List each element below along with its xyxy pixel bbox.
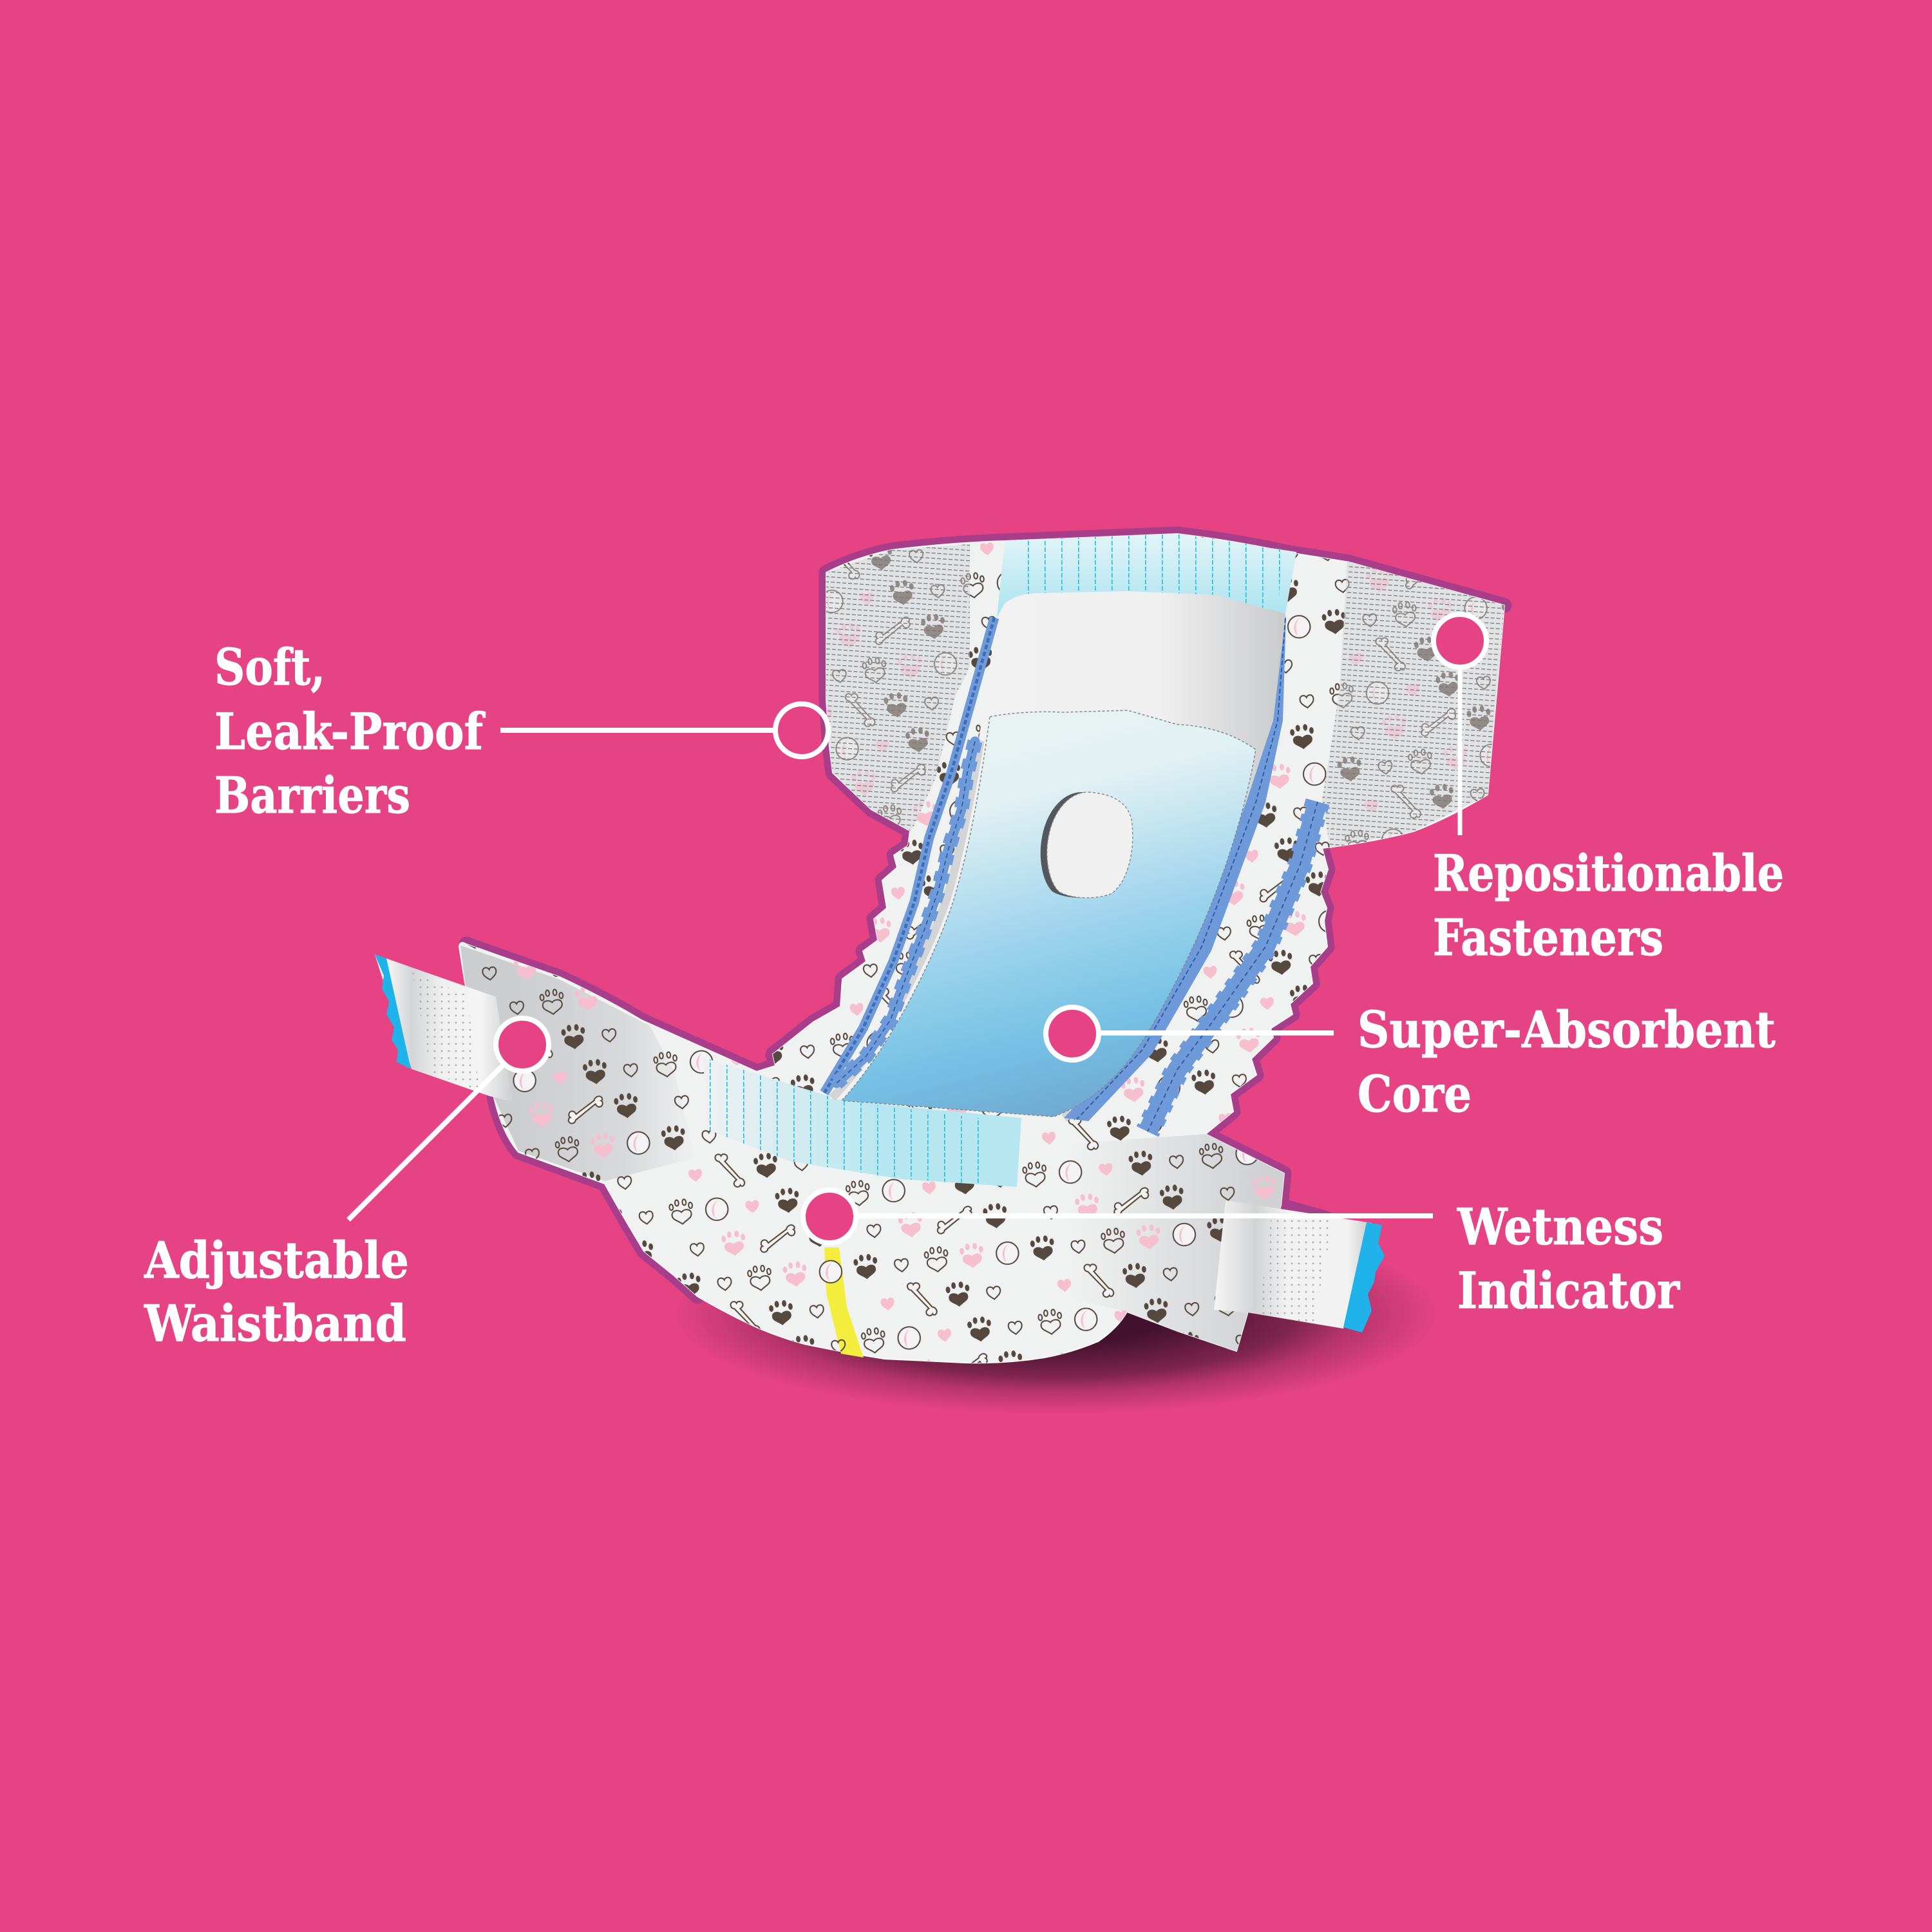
leader line bbox=[348, 1063, 506, 1220]
leader line bbox=[1098, 1030, 1334, 1036]
marker ring bbox=[775, 704, 828, 757]
marker bbox=[1434, 614, 1486, 667]
label text: Super-Absorbent bbox=[1358, 1001, 1776, 1059]
left fastener tape bbox=[375, 954, 513, 1102]
leader line bbox=[1458, 663, 1462, 835]
callout: wetness indicator bbox=[803, 1190, 1680, 1320]
left blue gather bbox=[824, 618, 994, 1093]
right blue gather bbox=[1064, 616, 1286, 1121]
label text: Adjustable bbox=[144, 1231, 409, 1290]
absorbent pad bbox=[829, 591, 1285, 1117]
marker bbox=[803, 1190, 856, 1243]
callout: super-absorbent core: Core bbox=[1358, 1065, 1472, 1124]
callout: repositionable fasteners bbox=[1433, 614, 1784, 967]
core cut-out dark edge bbox=[1041, 792, 1126, 898]
front inner waist band bbox=[703, 1057, 1021, 1187]
front left shaded panel bbox=[460, 945, 695, 1181]
right back wing base bbox=[1322, 561, 1504, 848]
ground shadow bbox=[676, 1214, 1436, 1414]
callout: adjustable waistband bbox=[144, 1018, 549, 1353]
callout: wetness indicator: Indicator bbox=[1457, 1262, 1680, 1320]
wetness indicator yellow stripe bbox=[824, 1247, 864, 1358]
callout: repositionable fasteners: Fasteners bbox=[1433, 909, 1663, 967]
right wing stripes bbox=[1322, 561, 1504, 848]
left back wing base bbox=[826, 544, 970, 831]
label text: Soft, bbox=[214, 638, 325, 697]
marker bbox=[1046, 1007, 1099, 1060]
label text: Repositionable bbox=[1433, 844, 1784, 903]
printed paw pattern bbox=[451, 528, 1513, 1365]
left wavy blue elastic bbox=[837, 741, 975, 1083]
label text: Wetness bbox=[1457, 1198, 1663, 1256]
diaper body bbox=[459, 534, 1504, 1363]
top inner waist band bbox=[997, 534, 1296, 618]
leader line bbox=[855, 1213, 1433, 1218]
callout: soft leak-proof barriers: Barriers bbox=[214, 766, 410, 825]
purple outline glow bbox=[466, 534, 1504, 1296]
leader line bbox=[500, 728, 776, 733]
callout: soft leak-proof barriers bbox=[214, 638, 828, 825]
left wing stripes bbox=[826, 544, 970, 831]
diaper illustration bbox=[375, 528, 1513, 1414]
callout: soft leak-proof barriers: Leak-Proof bbox=[214, 703, 486, 761]
pad grey edge bbox=[832, 741, 1253, 1118]
callout: super-absorbent core bbox=[1046, 1001, 1776, 1124]
front right shaded panel bbox=[1030, 1134, 1284, 1351]
marker bbox=[496, 1018, 549, 1071]
core cut-out bbox=[1047, 792, 1133, 898]
right fastener tape bbox=[1214, 1200, 1385, 1332]
absorbent core bbox=[842, 710, 1256, 1117]
right wavy blue elastic bbox=[1148, 802, 1318, 1132]
callout: adjustable waistband: Waistband bbox=[144, 1294, 406, 1353]
